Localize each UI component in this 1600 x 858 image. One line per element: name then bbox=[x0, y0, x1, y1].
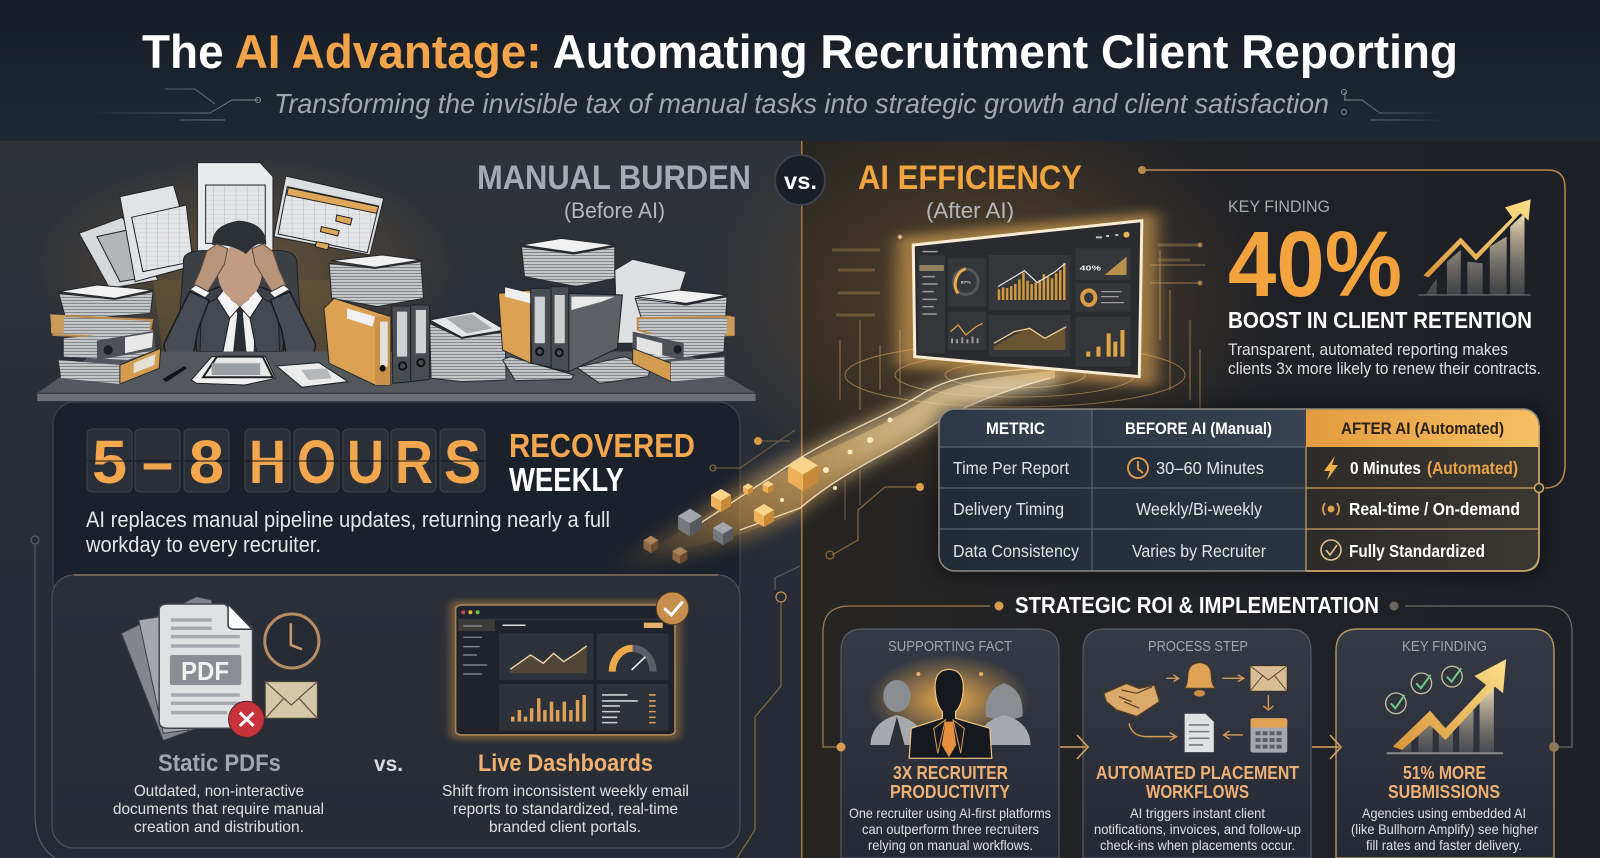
icon: growth chart bbox=[1418, 199, 1531, 295]
icon: signal bbox=[1323, 503, 1339, 515]
decorative circuit lines bbox=[31, 430, 924, 858]
arrows between cards bbox=[836, 735, 1559, 759]
stack D bbox=[521, 238, 615, 253]
card: process step: check-ins when placements occur. bbox=[1100, 837, 1295, 853]
boost text: clients 3x more likely to renew their contracts. bbox=[1228, 360, 1541, 378]
hours digits: – bbox=[142, 428, 173, 496]
boost text bbox=[1228, 307, 1541, 378]
live dashboards text: reports to standardized, real-time bbox=[453, 801, 678, 818]
icon: live dashboard bbox=[449, 592, 689, 740]
panel: static pdfs vs live dashboards bbox=[52, 575, 740, 848]
live dashboards text bbox=[442, 750, 689, 836]
key finding text: 40% bbox=[1228, 212, 1402, 316]
desk papers bbox=[191, 357, 276, 385]
comparison table: BEFORE AI (Manual) bbox=[1125, 419, 1272, 438]
stack B bbox=[331, 255, 421, 267]
folder and binders centre-right bbox=[498, 290, 531, 363]
key finding text: KEY FINDING bbox=[1228, 198, 1330, 216]
monitor: glowing dashboard bbox=[897, 212, 1157, 387]
card: key finding 51%: SUBMISSIONS bbox=[1388, 782, 1500, 802]
card: process step: AI triggers instant client bbox=[1130, 805, 1265, 821]
card: key finding 51%: KEY FINDING bbox=[1402, 639, 1487, 655]
data ribbon with cubes bbox=[600, 368, 1060, 572]
comparison table: 30–60 Minutes bbox=[1156, 458, 1264, 478]
card: key finding 51%: 51% MORE bbox=[1403, 763, 1486, 783]
comparison table: Data Consistency bbox=[953, 541, 1079, 561]
small stacks right bbox=[503, 357, 574, 381]
live dashboards text: branded client portals. bbox=[489, 819, 641, 836]
icon: rising chart with checks bbox=[1386, 659, 1506, 753]
heading: manual burden: MANUAL BURDEN bbox=[477, 159, 751, 197]
boost text: Transparent, automated reporting makes bbox=[1228, 341, 1508, 359]
comparison table: Weekly/Bi-weekly bbox=[1136, 499, 1262, 519]
hours digits: 8 bbox=[189, 428, 224, 496]
background papers bbox=[79, 163, 384, 288]
card: key finding 51%: fill rates and faster delivery. bbox=[1366, 837, 1522, 853]
strategic roi heading bbox=[823, 592, 1572, 747]
heading: ai efficiency bbox=[858, 159, 1082, 223]
static pdfs text bbox=[113, 750, 324, 836]
vs badge bbox=[775, 155, 825, 205]
live dashboards text: Shift from inconsistent weekly email bbox=[442, 783, 689, 800]
heading: ai efficiency: (After AI) bbox=[926, 198, 1014, 223]
card: supporting fact bbox=[841, 629, 1059, 858]
comparison table: METRIC bbox=[986, 419, 1045, 438]
subtitle: Transforming the invisible tax of manual tasks into strategic growth and client satisfaction bbox=[274, 88, 1329, 119]
suit torso bbox=[194, 285, 286, 352]
vs badge: vs. bbox=[784, 168, 817, 194]
card: key finding 51% bbox=[1336, 629, 1554, 858]
stack E bbox=[635, 290, 727, 303]
card: process step: WORKFLOWS bbox=[1146, 782, 1249, 802]
comparison table: Real-time / On-demand bbox=[1349, 499, 1520, 519]
5-8 hours panel: AI replaces manual pipeline updates, returning nearly a full bbox=[86, 507, 610, 532]
icon: bolt bbox=[1324, 456, 1338, 480]
icon: three recruiters bbox=[867, 655, 1031, 758]
comparison table: Varies by Recruiter bbox=[1132, 541, 1266, 561]
icon: workflow bbox=[1104, 663, 1287, 753]
static pdfs text: Outdated, non-interactive bbox=[134, 783, 304, 800]
5-8 hours panel: WEEKLY bbox=[509, 461, 624, 498]
hours digits bbox=[92, 428, 481, 496]
hours digits: O bbox=[297, 428, 336, 496]
comparison table: Delivery Timing bbox=[953, 499, 1064, 519]
hours digits: R bbox=[395, 428, 433, 496]
card: process step bbox=[1083, 629, 1311, 858]
5-8 hours panel: workday to every recruiter. bbox=[85, 532, 321, 557]
key finding frame bbox=[1138, 166, 1565, 488]
comparison table: Time Per Report bbox=[953, 458, 1069, 478]
comparison table: 0 Minutes bbox=[1350, 458, 1421, 478]
hours digits: S bbox=[444, 428, 481, 496]
desk bbox=[37, 352, 756, 393]
card: supporting fact: 3X RECRUITER bbox=[893, 763, 1008, 783]
card: supporting fact: SUPPORTING FACT bbox=[888, 639, 1012, 655]
illustration: overwhelmed recruiter at desk bbox=[31, 157, 756, 402]
card: supporting fact: PRODUCTIVITY bbox=[890, 782, 1010, 802]
5-8 hours panel bbox=[53, 402, 740, 602]
heading: ai efficiency: AI EFFICIENCY bbox=[858, 159, 1082, 197]
chair bbox=[153, 280, 337, 357]
hands and cuffs bbox=[193, 244, 228, 293]
static pdfs text: documents that require manual bbox=[113, 801, 324, 818]
stack C bbox=[430, 312, 505, 337]
flip tiles bbox=[87, 429, 485, 492]
comparison table: AFTER AI (Automated) bbox=[1341, 419, 1504, 438]
hours digits: H bbox=[249, 428, 286, 496]
sleeves bbox=[164, 292, 209, 359]
comparison table: (Automated) bbox=[1427, 458, 1518, 478]
card: supporting fact: One recruiter using AI-first platforms bbox=[849, 805, 1051, 821]
card: supporting fact: relying on manual workflows. bbox=[868, 837, 1033, 853]
icon: pdf document bbox=[121, 597, 319, 741]
monitor: glowing dashboard: 87% bbox=[961, 280, 971, 284]
static pdfs text: Static PDFs bbox=[158, 750, 281, 777]
card: key finding 51%: Agencies using embedded AI bbox=[1362, 805, 1526, 821]
pdf label: PDF bbox=[181, 656, 229, 686]
boost text: BOOST IN CLIENT RETENTION bbox=[1228, 307, 1532, 333]
5-8 hours panel: RECOVERED bbox=[509, 427, 695, 464]
card: process step: notifications, invoices, and follow-up bbox=[1094, 821, 1301, 837]
card: key finding 51%: (like Bullhorn Amplify) see higher bbox=[1351, 821, 1538, 837]
folder and binders centre-left bbox=[324, 298, 390, 385]
strategic roi heading: STRATEGIC ROI & IMPLEMENTATION bbox=[1015, 592, 1379, 618]
comparison table bbox=[934, 405, 1544, 577]
hours digits: U bbox=[347, 428, 384, 496]
card: process step: AUTOMATED PLACEMENT bbox=[1096, 763, 1299, 783]
static pdfs text: creation and distribution. bbox=[134, 819, 304, 836]
head bbox=[218, 245, 262, 301]
vs label: vs. bbox=[374, 753, 403, 776]
comparison table: Fully Standardized bbox=[1349, 541, 1485, 561]
card: process step: PROCESS STEP bbox=[1148, 639, 1248, 655]
live dashboards text: Live Dashboards bbox=[478, 750, 653, 777]
card: supporting fact: can outperform three recruiters bbox=[862, 821, 1039, 837]
heading: manual burden bbox=[477, 159, 751, 223]
stack A and binders bbox=[59, 285, 153, 298]
icon: clock bbox=[1128, 458, 1148, 478]
heading: manual burden: (Before AI) bbox=[564, 198, 665, 223]
hours digits: 5 bbox=[92, 428, 127, 496]
icon: check bbox=[1321, 540, 1341, 560]
monitor: glowing dashboard: 40% bbox=[1080, 264, 1101, 272]
title: The AI Advantage: Automating Recruitment Client Reporting bbox=[142, 25, 1458, 78]
circuit traces around monitor bbox=[832, 235, 1205, 410]
